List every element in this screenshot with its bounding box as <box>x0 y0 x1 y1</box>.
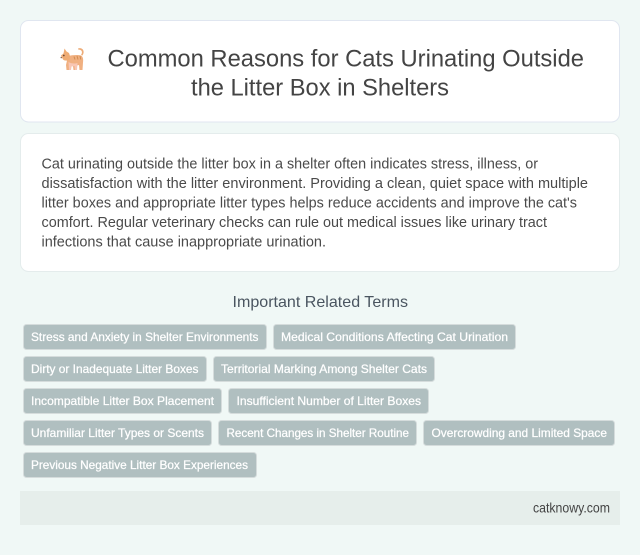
icon: cat <box>60 48 84 70</box>
tag list <box>24 324 614 478</box>
tag <box>218 420 416 446</box>
footer <box>20 491 620 525</box>
tag: Stress and Anxiety in Shelter Environments <box>31 330 258 344</box>
title text: Common Reasons for Cats Urinating Outside <box>108 46 584 72</box>
panel: title <box>20 20 620 122</box>
tag: Incompatible Litter Box Placement <box>31 394 215 408</box>
title text: the Litter Box in Shelters <box>191 74 449 102</box>
tag <box>228 388 428 414</box>
tag <box>24 420 212 446</box>
tag <box>424 420 614 446</box>
tag <box>24 356 206 382</box>
description text: Cat urinating outside the litter box in a shelter often indicates stress, illness, or <box>42 155 538 172</box>
tag: Previous Negative Litter Box Experiences <box>31 458 248 472</box>
tag: Medical Conditions Affecting Cat Urination <box>281 330 508 344</box>
tag: Unfamiliar Litter Types or Scents <box>31 426 204 440</box>
tag <box>214 356 434 382</box>
tag: Insufficient Number of Litter Boxes <box>236 394 421 408</box>
tag: Dirty or Inadequate Litter Boxes <box>31 362 198 376</box>
description text: litter boxes and appropriate litter types helps reduce accidents and improve the cat's <box>42 194 577 211</box>
tag <box>24 324 266 350</box>
tag: Recent Changes in Shelter Routine <box>226 426 409 440</box>
tag: Territorial Marking Among Shelter Cats <box>221 362 427 376</box>
heading: important related terms: Important Related Terms <box>232 294 408 311</box>
description text: infections that cause inappropriate urination. <box>42 233 326 250</box>
description text: comfort. Regular veterinary checks can rule out medical issues like urinary tract <box>42 214 548 231</box>
panel: description <box>20 134 620 272</box>
tag <box>24 452 256 478</box>
title text <box>108 46 584 102</box>
description text: dissatisfaction with the litter environment. Providing a clean, quiet space with multiple <box>42 175 588 192</box>
tag <box>24 388 222 414</box>
tag <box>274 324 516 350</box>
tag: Overcrowding and Limited Space <box>432 426 607 440</box>
footer text: catknowy.com <box>533 499 610 515</box>
description text <box>42 155 588 250</box>
